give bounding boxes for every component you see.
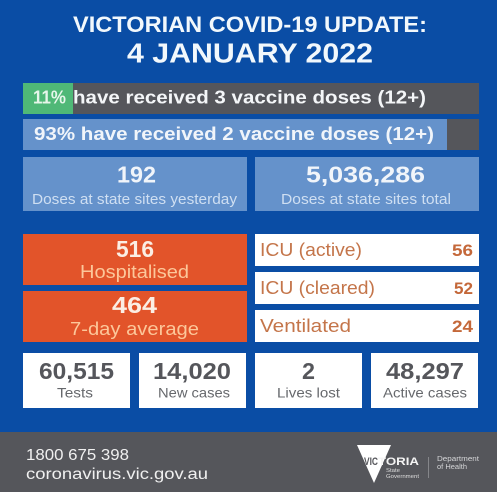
title [73, 12, 427, 68]
panel: ICU cleared: 52 [454, 279, 473, 298]
title: VICTORIAN COVID-19 UPDATE: [73, 12, 427, 37]
logo: Victoria State Government: VIC [364, 456, 378, 468]
panel: lives lost [255, 353, 362, 408]
panel: three vaccine doses bar [23, 83, 479, 114]
department of health label: of Health [437, 464, 467, 471]
panel: doses yesterday: Doses at state sites yesterday [32, 192, 238, 208]
contact details [26, 447, 208, 483]
panel: hospitalised [23, 234, 247, 285]
panel: new cases [139, 353, 246, 408]
panel: active cases [371, 353, 478, 408]
panel: tests [23, 353, 130, 408]
panel: 7-day average [23, 291, 247, 342]
title: 4 JANUARY 2022 [127, 38, 373, 68]
panel: ventilated: Ventilated [260, 316, 351, 336]
panel: doses total: 5,036,286 [306, 162, 425, 188]
panel: new cases: New cases [158, 384, 230, 400]
panel: active cases: Active cases [383, 384, 467, 400]
panel: doses total [255, 157, 479, 211]
panel: ICU cleared [255, 272, 479, 304]
panel: new cases: 14,020 [153, 358, 231, 384]
panel: two vaccine doses bar [23, 119, 479, 150]
panel: ICU active [255, 234, 479, 266]
panel: ventilated: 24 [452, 317, 474, 336]
panel: three vaccine doses bar: have received 3 vaccine doses (12+) [73, 88, 426, 108]
panel: lives lost: Lives lost [277, 384, 340, 400]
panel: three vaccine doses bar: 11% [33, 88, 66, 108]
contact details: 1800 675 398 [26, 447, 129, 464]
panel: ICU active: 56 [452, 241, 473, 260]
panel: doses yesterday [23, 157, 247, 211]
panel: tests: Tests [57, 384, 93, 400]
panel: 7-day average: 7-day average [70, 318, 199, 339]
panel: lives lost: 2 [302, 358, 315, 384]
panel: ICU active: ICU (active) [260, 240, 362, 260]
department of health label: Department [437, 456, 479, 463]
panel: hospitalised: 516 [116, 236, 154, 262]
panel: doses total: Doses at state sites total [281, 192, 451, 208]
panel: ICU cleared: ICU (cleared) [260, 278, 375, 298]
panel: hospitalised: Hospitalised [80, 261, 189, 282]
panel: tests: 60,515 [39, 358, 114, 384]
contact details: coronavirus.vic.gov.au [26, 466, 208, 483]
panel: 7-day average: 464 [112, 292, 157, 318]
panel: active cases: 48,297 [386, 358, 464, 384]
footer [0, 432, 497, 492]
panel: ventilated [255, 310, 479, 342]
department of health label [437, 456, 479, 471]
logo: Victoria State Government: Government [386, 474, 420, 480]
logo: Victoria State Government: TORIA [378, 456, 419, 468]
logo: Victoria State Government: State [386, 468, 400, 474]
logo: Victoria State Government [357, 445, 420, 483]
panel: doses yesterday: 192 [117, 162, 156, 188]
panel: two vaccine doses bar: 93% have received 2 vaccine doses (12+) [34, 124, 434, 144]
